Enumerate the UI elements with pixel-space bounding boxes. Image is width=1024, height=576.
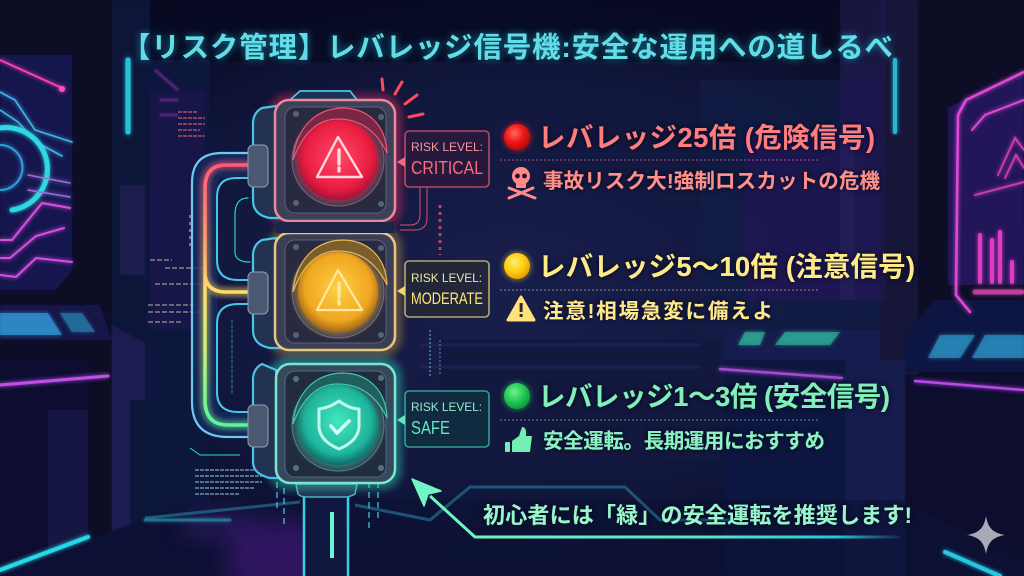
risk label: safe: RISK LEVEL:: [411, 402, 482, 414]
heading: leverage 1-3x: レバレッジ1〜3倍 (安全信号): [538, 381, 890, 412]
housing connector: [276, 222, 394, 233]
risk label: moderate: [397, 261, 489, 317]
floor outline: [145, 487, 740, 520]
pole: [277, 482, 378, 576]
heading: leverage 25x: レバレッジ25倍 (危険信号): [538, 122, 875, 153]
left console: [0, 313, 62, 335]
description: safe: 安全運転。長期運用におすすめ: [543, 430, 825, 453]
risk label: critical: RISK LEVEL:: [411, 142, 483, 154]
icon: thumbs up: [505, 427, 532, 452]
side casing: [253, 364, 280, 478]
right console: [928, 335, 1024, 358]
traffic light: yellow housing: [248, 227, 402, 357]
green signal dot: [502, 381, 532, 411]
risk label: safe: SAFE: [411, 418, 450, 438]
risk label: critical: CRITICAL: [411, 158, 483, 178]
warning symbol: [317, 270, 362, 310]
left screen circuits: [0, 60, 72, 277]
shield check symbol: [319, 401, 359, 449]
right screen: [956, 72, 1024, 312]
description: moderate: 注意!相場急変に備えよ: [543, 300, 773, 323]
red alert rays: [382, 79, 423, 117]
small data text textures: [145, 112, 740, 520]
center panel strips: [738, 332, 840, 345]
right cabinet wall: [700, 0, 1024, 576]
center corridor: [440, 340, 720, 460]
safe text block: [500, 381, 890, 453]
side casing: [253, 238, 280, 348]
yellow signal dot: [502, 251, 532, 281]
risk label: moderate: MODERATE: [411, 289, 483, 308]
title: 【リスク管理】レバレッジ信号機:安全な運用への道しるべ: [122, 32, 893, 64]
sparkle mark: [967, 516, 1005, 554]
lens visor: [293, 240, 387, 292]
moderate text block: [500, 251, 915, 323]
lens visor: [293, 108, 387, 160]
callout text: 初心者には「緑」の安全運転を推奨します!: [483, 503, 912, 528]
risk label: critical: [397, 131, 489, 230]
title: 【リスク管理】レバレッジ信号機:安全な運用への道しるべ: [122, 32, 893, 64]
heading: leverage 5-10x: レバレッジ5〜10倍 (注意信号): [538, 251, 915, 282]
description: critical: 事故リスク大!強制ロスカットの危機: [543, 169, 880, 193]
callout arrow: [412, 479, 900, 537]
traffic light: green housing: [248, 357, 402, 490]
critical text block: [500, 122, 880, 198]
left cabinet wall: [0, 0, 260, 576]
side casing: [253, 106, 280, 218]
icon: warning triangle: [508, 297, 534, 320]
traffic light: red housing: [248, 91, 402, 228]
risk label: safe: [397, 391, 489, 447]
connecting pipes: [192, 153, 250, 437]
lens visor: [293, 373, 387, 424]
red signal dot: [502, 122, 532, 152]
risk label: moderate: RISK LEVEL:: [411, 273, 482, 285]
icon: skull and crossbones: [509, 167, 535, 198]
warning symbol: [317, 137, 362, 177]
